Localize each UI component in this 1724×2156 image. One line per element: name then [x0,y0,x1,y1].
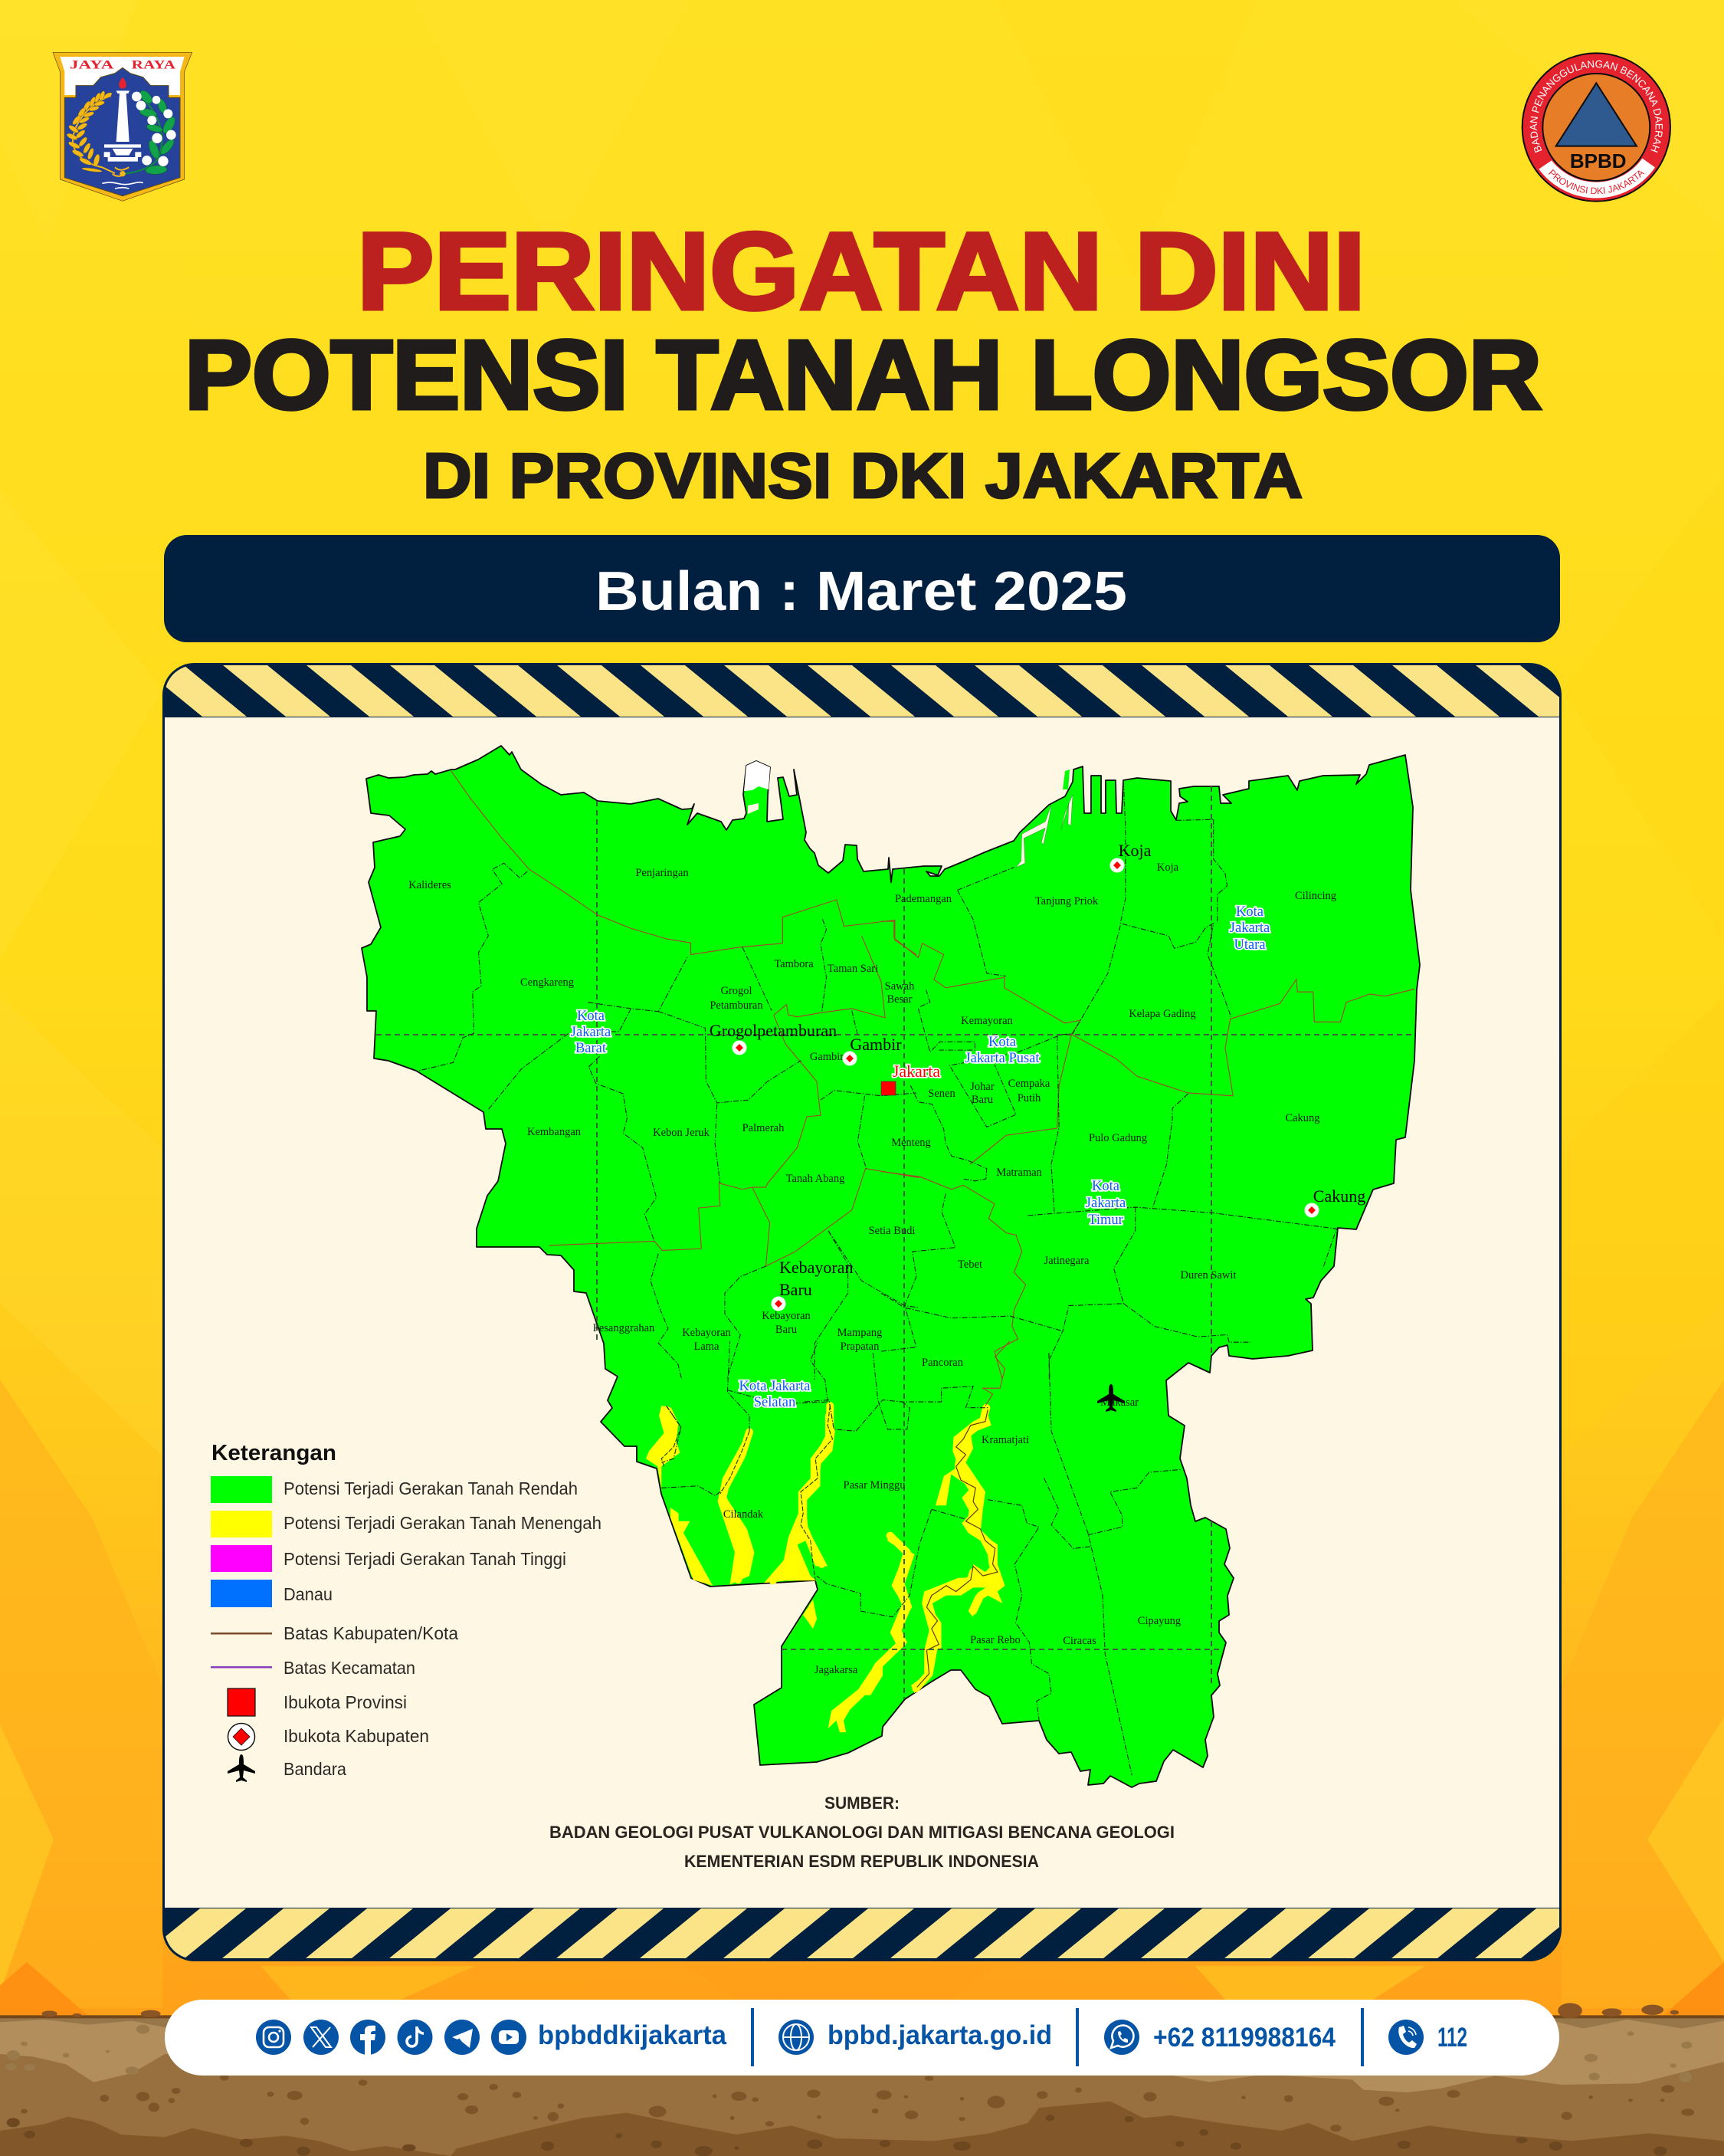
map marker: Jakarta provincial capital [881,1062,940,1095]
map labels: regency capitals: Cakung [1313,1186,1365,1206]
map labels: regency capitals: Baru [779,1280,812,1299]
map marker: Jakarta provincial capital: Jakarta [893,1062,940,1081]
icon: facebook [350,2020,385,2055]
legend item: regency capital: Ibukota Kabupaten [284,1726,429,1746]
panel: map card [162,663,1562,1961]
map labels: districts: Kemayoran [961,1015,1014,1027]
source note: SUMBER: [824,1793,900,1813]
map: regency boundaries [451,771,1414,1406]
title line: Peringatan Dini: PERINGATAN DINI [357,211,1365,333]
map labels: cities: Utara [1234,937,1266,953]
map: medium potential zones (yellow) [646,1402,1005,1732]
map labels: districts: Kalideres [408,879,451,891]
source note [549,1793,1175,1871]
icon: instagram [256,2020,291,2055]
map labels: districts: Ciracas [1063,1635,1096,1647]
legend item: airport [228,1754,346,1782]
map labels: districts: Pulo Gadung [1089,1132,1147,1144]
map labels: districts: Baru [972,1094,993,1106]
map labels: districts: Mampang [837,1327,882,1339]
legend item: regency capital [228,1723,429,1751]
map labels: cities: Kota Jakarta [739,1379,810,1394]
map labels: districts: Menteng [891,1137,931,1149]
map labels: districts: Lama [693,1341,719,1353]
map labels: districts: Jagakarsa [814,1664,858,1676]
legend item: low: Potensi Terjadi Gerakan Tanah Rendah [284,1478,578,1498]
icon: tiktok [397,2020,432,2055]
map labels: districts: Senen [928,1088,955,1100]
logo text: BPBD: BPBD [1570,149,1626,172]
logo text: agency name: BADAN PENANGGULANGAN BENCANA DAERAH [1529,60,1663,153]
icon: youtube [491,2020,526,2055]
map labels: districts: Pasar Rebo [970,1634,1021,1646]
map labels: districts: Matraman [996,1167,1043,1179]
map marker: airport [1097,1384,1125,1412]
legend [211,1441,601,1782]
map labels: districts: Cilandak [723,1508,764,1521]
map labels: districts: Cakung [1285,1112,1320,1124]
legend item: medium: Potensi Terjadi Gerakan Tanah Menengah [284,1513,601,1533]
icon: telegram [444,2020,480,2055]
legend heading: Keterangan [211,1441,336,1465]
logo text: JAYA RAYA [70,58,176,71]
map labels: districts: Petamburan [710,999,763,1012]
logo: BPBD [1522,52,1671,202]
icon: X [303,2020,339,2055]
map labels: regency capitals: Kebayoran [779,1258,854,1277]
map labels: districts: Kebayoran [762,1310,811,1322]
title [185,211,1542,511]
map labels: districts: Tambora [774,958,814,970]
map labels: districts: Cilincing [1295,890,1336,902]
logo text: JAYA RAYA: JAYA [70,58,114,71]
title line: Potensi Tanah Longsor: POTENSI TANAH LONGSOR [185,320,1542,430]
icon: phone [1388,2020,1424,2055]
map labels: districts: Pancoran [922,1357,964,1369]
map labels: cities: Jakarta [1086,1196,1126,1211]
map labels: districts: Cempaka [1008,1078,1050,1090]
map labels: regency capitals: Gambir [850,1035,902,1054]
map labels: districts: Tanjung Priok [1035,895,1099,907]
website: bpbd.jakarta.go.id [828,2020,1052,2050]
map labels: districts: Cipayung [1138,1615,1181,1627]
map labels: districts: Tebet [958,1258,982,1271]
map labels: districts: Sawah [885,980,915,993]
map labels: districts: Pasar Minggu [844,1479,905,1491]
map labels: districts: Pesanggrahan [593,1322,655,1334]
legend item: high: Potensi Terjadi Gerakan Tanah Tinggi [284,1549,566,1569]
social handle: bpbddkijakarta [538,2020,727,2050]
map labels: cities: Jakarta Pusat [965,1051,1040,1066]
map labels: districts: Baru [775,1324,797,1336]
icon: globe [778,2020,814,2055]
map labels: cities: Selatan [754,1395,795,1410]
legend item: lake: Danau [284,1584,333,1604]
map labels: districts: Prapatan [841,1341,880,1353]
emergency number: 112 [1437,2023,1467,2053]
legend item: provincial capital: Ibukota Provinsi [284,1692,407,1712]
month banner: Bulan : Maret 2025 [595,561,1127,622]
map labels: regency capitals [710,841,1365,1299]
map labels: districts: Kembangan [527,1126,582,1138]
footer bar [165,2000,1559,2076]
map labels: cities: Jakarta [571,1025,611,1040]
map markers: regency capitals [733,858,1319,1311]
map labels: districts: Johar [970,1081,995,1093]
map labels: districts: Penjaringan [635,867,689,879]
map labels: districts: Palmerah [742,1122,785,1134]
map labels: districts: Cengkareng [520,976,574,989]
map labels: districts: Besar [887,993,913,1006]
map labels: districts: Kramatjati [982,1434,1029,1446]
map labels: districts: Kebayoran [682,1327,732,1339]
title line: DI Provinsi DKI Jakarta: DI PROVINSI DKI JAKARTA [423,440,1303,511]
map: DKI Jakarta [362,746,1420,1787]
map labels: cities: Timur [1088,1213,1123,1228]
map labels: districts: Jatinegara [1044,1255,1090,1267]
month banner [164,535,1560,642]
logo text: JAYA RAYA: RAYA [132,58,176,71]
legend item: low [211,1476,578,1503]
map labels: districts: Kelapa Gading [1129,1008,1196,1020]
legend item: district boundary: Batas Kecamatan [284,1658,415,1678]
legend item: airport: Bandara [284,1759,346,1779]
map labels: districts: Grogol [720,985,752,997]
legend item: medium [211,1511,601,1537]
map labels: districts: Gambir [810,1051,844,1063]
map labels: districts: Setia Budi [869,1225,915,1237]
map labels: districts: Putih [1018,1092,1041,1104]
map labels: districts: Kebon Jeruk [653,1127,710,1139]
map labels: cities: Kota [1092,1179,1119,1194]
map labels: districts: Tanah Abang [786,1173,844,1185]
map labels: districts: Makasar [1100,1396,1139,1409]
map labels: districts: Taman Sari [828,963,878,975]
map labels: cities: Kota [988,1035,1016,1050]
hazard stripes bottom [166,1908,1559,1958]
legend item: regency boundary: Batas Kabupaten/Kota [284,1623,458,1643]
source note: BADAN GEOLOGI PUSAT VULKANOLOGI DAN MITIGASI BENCANA GEOLOGI [549,1823,1175,1842]
source note: KEMENTERIAN ESDM REPUBLIK INDONESIA [684,1852,1039,1871]
map: grid lines [376,786,1414,1699]
map labels: regency capitals: Koja [1119,841,1152,860]
map labels: districts: Koja [1157,861,1179,874]
legend item: lake [211,1580,333,1607]
map labels: districts: Duren Sawit [1181,1269,1236,1281]
ground [0,2003,1724,2156]
logo: Jakarta coat of arms [53,52,192,201]
map labels: cities: Jakarta [1230,920,1270,936]
map base: land area [362,746,1420,1787]
map labels: cities: Kota [1236,904,1264,920]
legend item: high [211,1545,566,1572]
map: harbour details [744,761,1073,868]
map labels: districts: Pademangan [895,893,952,905]
map labels: districts [408,861,1336,1676]
icon: whatsapp [1104,2020,1139,2055]
map labels: regency capitals: Grogolpetamburan [710,1021,837,1040]
map labels: cities [571,904,1270,1410]
hazard stripes top [139,665,1667,717]
logo: monument [104,77,141,162]
logo text: province: PROVINSI DKI JAKARTA [1549,169,1644,195]
whatsapp number: +62 8119988164 [1153,2023,1336,2053]
logo: cotton branch [102,88,178,189]
map labels: cities: Barat [575,1041,607,1056]
map: district boundaries [418,782,1336,1775]
map labels: cities: Kota [577,1009,605,1024]
logo: rice wreath [66,90,115,173]
legend item: provincial capital [228,1688,407,1716]
